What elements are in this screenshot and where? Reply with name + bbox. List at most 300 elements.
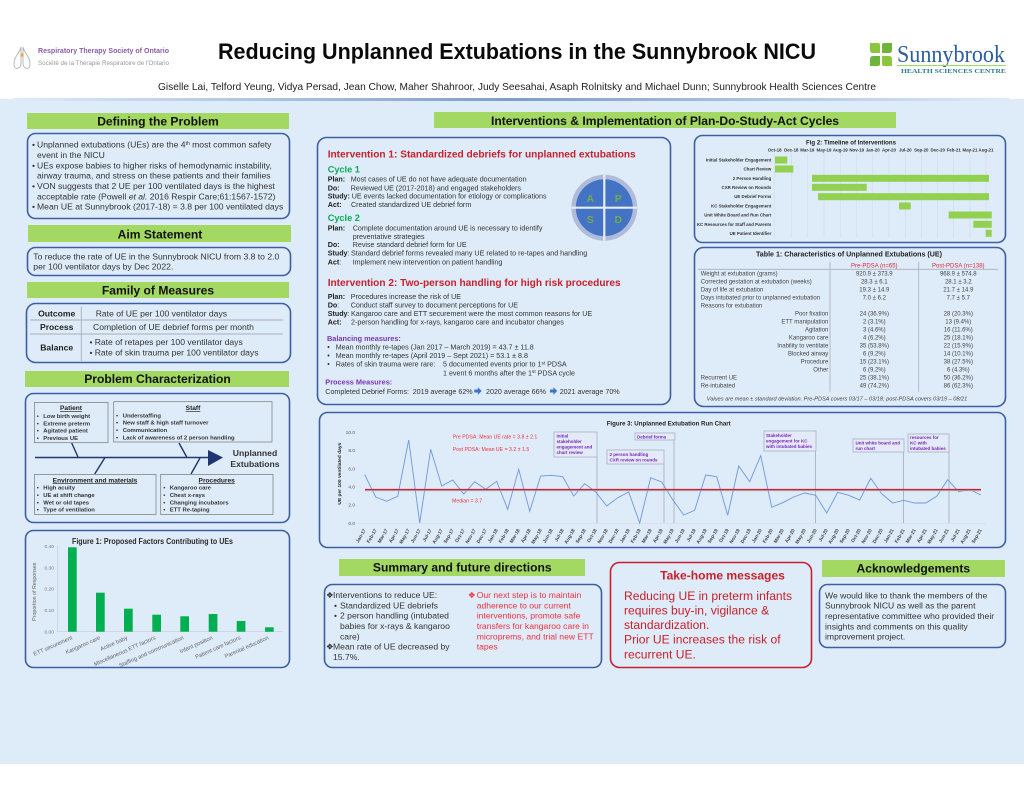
text: summary left: •: [334, 611, 337, 621]
box: staff: •: [116, 413, 118, 419]
box: staff: Staff: [186, 405, 201, 412]
text: summary left: Interventions to reduce UE:: [333, 590, 437, 600]
month labels: May-18: [530, 528, 544, 545]
box: staff: New staff & high staff turnover: [123, 421, 209, 427]
table: characteristics: 28.3 ± 6.1: [861, 279, 888, 285]
arrow: [474, 387, 482, 395]
table: measures: Rate of skin trauma per 100 ventilator days: [95, 347, 259, 357]
text: summary left: 2 person handling (intubated: [340, 611, 449, 621]
text: aim: per 100 ventilator days by Dec 2022.: [33, 262, 173, 272]
box: staff: Lack of awareness of 2 person handling: [123, 435, 235, 441]
box: environment and materials: Environment and materials: [53, 477, 138, 484]
gantt chart: KC Stakeholder Engagement: [711, 204, 772, 208]
callout: 2 person handling: CXR review on rounds: [610, 458, 658, 462]
text: summary right: interventions, promote safe: [477, 611, 581, 621]
icon: PDSA cycle: [571, 175, 637, 241]
text: problem bullets: event in the NICU: [37, 150, 105, 160]
cycle 2: Do:: [328, 241, 340, 249]
month labels: Jun-20: [806, 528, 819, 544]
bar chart: proposed factors: Active baby: [100, 635, 129, 653]
callout: initial stakeholder engagement: chart review: [556, 450, 583, 455]
month labels: Apr-18: [520, 528, 533, 544]
text: summary right: ❖: [468, 590, 476, 600]
balancing measures: •: [327, 361, 330, 369]
table: characteristics: Day of life at extubation: [701, 287, 763, 293]
table: characteristics: Recurrent UE: [701, 376, 737, 382]
month labels: Jul-20: [818, 528, 830, 543]
box: environment and materials: Wet or old tapes: [43, 500, 90, 506]
line chart: 10.0: [346, 430, 355, 436]
intervention 2: Plan:: [328, 293, 345, 301]
heading: table 1: Table 1: Characteristics of Unplanned Extubations (UE): [756, 252, 942, 259]
table: measures: Completion of UE debrief forms per month: [93, 322, 254, 332]
month labels: Aug-17: [431, 528, 445, 545]
intervention 1: [328, 150, 637, 266]
text: problem bullets: Unplanned extubations (UEs) are the 4: [37, 140, 186, 150]
balancing measures: •: [327, 352, 330, 360]
text: problem bullets: airway trauma, and stress on these patients and their families: [37, 171, 271, 181]
table: characteristics: 15 (23.1%): [860, 360, 889, 366]
panel: take-home messages: [610, 562, 812, 668]
heading: acknowledgements: [822, 560, 1005, 577]
table: characteristics: 968.9 ± 574.8: [940, 271, 977, 277]
cycle 1: Cycle 1: [328, 164, 360, 174]
callout: stakeholder engagement for KC: engagement for KC: [766, 438, 808, 444]
line chart: 4.0: [348, 484, 355, 490]
table: characteristics: Re-intubated: [701, 384, 735, 390]
month labels: Mar-20: [773, 528, 786, 544]
cycle 1: UE events lacked documentation for etiology or complications: [352, 193, 547, 201]
bar chart: proposed factors: Parental education: [224, 635, 270, 660]
month labels: Sep-21: [971, 528, 984, 545]
month labels: Feb-21: [894, 528, 907, 544]
gantt chart: Nov-19: [849, 148, 865, 153]
month labels: Sep-18: [575, 528, 588, 545]
panel: defining the problem: [27, 113, 290, 218]
text: acknowledgements: insights and comments on this quality: [825, 621, 969, 631]
box: staff: •: [116, 428, 118, 434]
line chart: UE per 100 ventilated days: [337, 442, 343, 505]
title: Reducing Unplanned Extubations in the Sunnybrook NICU: [218, 39, 816, 64]
gantt chart: Jul-20: [899, 148, 912, 153]
bar chart: proposed factors: 0.20: [44, 586, 54, 592]
callout: initial stakeholder engagement: Initial: [556, 434, 568, 438]
month labels: Mar-21: [905, 528, 918, 544]
panel: figure 2 timeline: [694, 136, 1006, 242]
line chart: 6.0: [348, 466, 355, 472]
table: characteristics: 16 (11.6%): [944, 327, 973, 333]
box: patient: Agitated patient: [43, 429, 88, 435]
table: characteristics: Other: [813, 368, 828, 374]
bar chart: proposed factors: [32, 544, 283, 669]
month labels: Nov-20: [861, 528, 874, 545]
month labels: Jun-19: [674, 528, 687, 544]
icon: PDSA cycle: A: [587, 193, 595, 205]
month labels: Jun-18: [542, 528, 555, 544]
text: summary left: ❖: [326, 642, 334, 652]
cycle 1: [328, 164, 547, 209]
logo: Respiratory Therapy Society of Ontario: Société de la Thérapie Respiratoire de l'Ontario: [38, 60, 169, 67]
box: procedures: •: [163, 493, 165, 499]
month labels: Aug-18: [563, 528, 577, 545]
text: summary left: care): [340, 631, 360, 641]
gantt chart: Oct-18: [768, 148, 782, 153]
diagram: fishbone: [34, 402, 280, 514]
box: patient: •: [37, 414, 39, 420]
box: procedures: Chest x-rays: [170, 493, 206, 499]
bar chart: proposed factors: 0.40: [44, 544, 54, 550]
callout: 2 person handling: [607, 450, 664, 464]
table: characteristics: 28.1 ± 3.2: [945, 279, 972, 285]
month labels: Aug-19: [695, 528, 709, 545]
table: characteristics: Kangaroo care: [789, 335, 829, 341]
process measures: [325, 378, 620, 396]
cycle 1: Act:: [328, 201, 342, 209]
gantt chart: Aug-19: [833, 148, 848, 153]
process measures: Completed Debrief Forms:: [325, 388, 409, 396]
gantt chart: Dec-18: [784, 148, 799, 153]
panel: acknowledgements: [820, 560, 1006, 648]
line chart: 2.0: [348, 502, 355, 508]
month labels: Jul-17: [422, 528, 434, 543]
table: characteristics: 7.7 ± 5.7: [947, 295, 971, 301]
box: staff: [114, 402, 272, 442]
line chart: 0.0: [348, 521, 355, 527]
heading: aim statement: [28, 225, 291, 242]
cycle 2: preventative strategies: [353, 233, 425, 241]
table: characteristics: 6 (9.2%): [863, 352, 886, 358]
text: take-home: Prior UE increases the risk of: [624, 632, 781, 646]
balancing measures: PDSA: [545, 361, 567, 369]
box: patient: •: [37, 421, 39, 427]
process measures: 2019 average 62%: [413, 388, 473, 396]
intervention 2: Do: [328, 302, 338, 310]
box: procedures: [161, 474, 273, 514]
month labels: Feb-19: [630, 528, 643, 544]
cycle 2: [328, 213, 587, 266]
month labels: Nov-18: [597, 528, 610, 545]
text: summary left: babies for x-rays & kangaroo: [340, 621, 450, 631]
callout: 2 person handling: 2 person handling: [610, 452, 649, 457]
month labels: Jan-21: [883, 528, 896, 544]
balancing measures: 5 documented events prior to 1: [443, 361, 541, 369]
gantt chart: Chart Review: [743, 166, 772, 172]
text: problem bullets: Mean UE at Sunnybrook (2017-18) = 3.8 per 100 ventilated days: [37, 202, 283, 212]
panel: interventions: [318, 138, 670, 404]
table: characteristics: 21.7 ± 14.9: [943, 287, 974, 293]
month labels: Dec-20: [872, 528, 885, 545]
box: staff: Understaffing: [123, 413, 161, 419]
process measures: Process Measures:: [325, 378, 392, 387]
text: problem bullets: most common safety: [190, 140, 272, 150]
text: summary right: tapes: [477, 642, 498, 652]
box: procedures: Changing incubators: [170, 500, 229, 506]
table: characteristics: Corrected gestation at extubation (weeks): [701, 279, 812, 285]
table: characteristics: 3 (4.6%): [863, 327, 886, 333]
balancing measures: st: [541, 360, 546, 366]
month labels: Sep-20: [839, 528, 852, 545]
text: summary left: Mean rate of UE decreased by: [333, 642, 450, 652]
box: procedures: ETT Re-taping: [170, 508, 210, 514]
text: take-home: Reducing UE in preterm infants: [624, 589, 792, 603]
gantt chart: [697, 148, 994, 238]
table: characteristics: Agitation: [805, 327, 828, 333]
text: problem bullets: •: [32, 160, 35, 170]
table: characteristics: 49 (74.2%): [860, 384, 889, 390]
box: patient: •: [37, 429, 39, 435]
table: characteristics: 24 (36.9%): [860, 311, 889, 317]
gantt chart: May-21: [963, 148, 978, 153]
balancing measures: Mean monthly re-tapes (April 2019 – Sept 2021) = 53.1 ± 8.8: [336, 352, 528, 360]
month labels: Feb-18: [498, 528, 511, 544]
month labels: Jun-17: [410, 528, 423, 544]
process measures: 2020 average 66%: [486, 388, 547, 396]
table: characteristics: 25 (18.1%): [944, 335, 973, 341]
month labels: Jan-19: [619, 528, 632, 544]
annotation: post PDSA mean: Post PDSA: Mean UE = 3.2 ± 1.5: [453, 447, 529, 453]
panel: aim statement: [28, 225, 291, 276]
gantt chart: KC Resources for Staff and Parents: [697, 222, 772, 227]
panel: figure 1: [26, 530, 290, 669]
gantt chart: Apr-20: [882, 148, 897, 153]
text: summary right: adherence to our current: [477, 600, 571, 610]
callout: stakeholder engagement for KC: with intubated babies: [765, 444, 812, 449]
heading: summary: [339, 559, 585, 576]
logo: Sunnybrook Health Sciences Centre: [870, 42, 1006, 75]
table: characteristics: [701, 264, 985, 390]
table: measures: [38, 308, 259, 357]
callout: unit white board: Unit white board and: [856, 440, 900, 446]
table: characteristics: 28 (20.3%): [944, 311, 973, 317]
intervention 2: Kangaroo care and ETT securement were the most common reasons for UE: [351, 310, 592, 318]
arrow: [550, 387, 557, 395]
text: summary left: Standardized UE debriefs: [340, 600, 438, 610]
heading: family of measures: [27, 282, 289, 298]
text: acknowledgements: improvement project.: [825, 632, 905, 642]
cycle 1: Study:: [328, 193, 350, 201]
heading: acknowledgements: Acknowledgements: [857, 562, 970, 576]
month labels: Dec-19: [740, 528, 753, 545]
balancing measures: Mean monthly re-tapes (Jan 2017 – March 2019) = 43.7 ± 11.8: [336, 343, 534, 351]
icon: PDSA cycle: D: [615, 214, 623, 226]
month labels: May-21: [926, 528, 940, 545]
intervention 2: Act:: [328, 319, 342, 327]
table: characteristics: 6 (9.2%): [863, 368, 886, 374]
bar chart: proposed factors: 0.30: [44, 566, 54, 572]
callout: resources for KC: resources for: [910, 435, 939, 440]
intervention 2: [325, 278, 621, 396]
cycle 1: Created standardized UE debrief form: [351, 201, 471, 209]
gantt chart: Aug-21: [979, 148, 994, 153]
gantt chart: Mar-19: [800, 148, 815, 153]
annotation: pre PDSA mean: Pre PDSA: Mean UE rate = 3.8 ± 2.1: [453, 435, 537, 441]
table: characteristics: 6 (4.3%): [947, 368, 970, 374]
gantt chart: Initial Stakeholder Engagement: [706, 158, 772, 162]
table footnote: Values are mean ± standard deviation. Pre-PDSA covers 03/17 – 03/18; post-PDSA covers 03/19 – 08/21: [707, 396, 967, 402]
table: characteristics: Weight at extubation (grams): [701, 271, 778, 277]
cycle 2: Cycle 2: [328, 213, 360, 223]
box: environment and materials: •: [37, 486, 39, 492]
table: characteristics: 22 (15.9%): [944, 343, 973, 349]
box: patient: Low birth weight: [43, 414, 90, 420]
heading: problem characterization: [25, 371, 289, 387]
month labels: Aug-20: [827, 528, 841, 545]
gantt chart: CXR Review on Rounds: [722, 185, 772, 190]
panel: summary and future directions: [324, 559, 602, 668]
callout: unit white board: run chart: [856, 446, 876, 451]
intervention 2: Intervention 2: Two-person handling for high risk procedures: [328, 278, 621, 289]
cycle 2: Plan:: [328, 224, 345, 232]
month labels: Sep-19: [707, 528, 720, 545]
panel: family of measures: [26, 282, 290, 362]
month labels: Jul-19: [686, 528, 698, 543]
callout: initial stakeholder engagement: stakeholder: [556, 439, 582, 444]
box: procedures: Procedures: [199, 477, 235, 484]
bar chart: proposed factors: 0.00: [44, 630, 54, 636]
gantt chart: Feb-21: [947, 148, 961, 153]
intervention 2: Procedures increase the risk of UE: [351, 293, 461, 301]
callout: debrief forms: [635, 433, 675, 440]
text: problem bullets: •: [32, 140, 35, 150]
table: characteristics: Reasons for extubation: [701, 303, 762, 309]
intervention 2: 2-person handling for x-rays, kangaroo care and incubator changes: [351, 319, 564, 327]
callout: resources for KC: KC with: [910, 440, 927, 446]
heading: figure 1: Figure 1: Proposed Factors Contributing to UEs: [72, 537, 233, 546]
panel: figure 3 run chart: [320, 412, 1006, 548]
table: characteristics: Inability to ventilate: [777, 343, 829, 349]
table: measures: •: [90, 337, 93, 347]
month labels: Nov-19: [729, 528, 742, 545]
gantt chart: 2 Person Handling: [733, 176, 772, 181]
month labels: May-17: [398, 528, 412, 545]
callout: resources for KC: intubated babies: [910, 446, 946, 451]
gantt chart: UE Patient Identifier: [730, 231, 772, 236]
box: staff: •: [116, 421, 118, 427]
heading: defining the problem: Defining the Problem: [97, 115, 219, 129]
balancing measures: Balancing measures:: [327, 334, 401, 343]
table: characteristics: 86 (62.3%): [944, 384, 973, 390]
heading: problem characterization: Problem Characterization: [84, 372, 231, 386]
month labels: [355, 528, 984, 545]
balancing measures: PDSA cycle: [536, 369, 575, 377]
panel: problem characterization: [25, 371, 290, 522]
month labels: Apr-17: [388, 528, 401, 544]
month labels: Sep-17: [443, 528, 456, 545]
month labels: Oct-18: [586, 528, 599, 544]
text: problem bullets: •: [32, 181, 35, 191]
heading: interventions and implementation: [434, 112, 896, 128]
box: staff: Communication: [123, 428, 168, 434]
logo: Respiratory Therapy Society of Ontario: Respiratory Therapy Society of Ontario: [38, 48, 169, 55]
bar chart: proposed factors: Kangaroo care: [65, 635, 102, 656]
intervention 2: Conduct staff survey to document perceptions for UE: [351, 302, 518, 310]
table: characteristics: ETT manipulation: [781, 319, 828, 325]
text: problem bullets: acceptable rate (Powell: [37, 191, 129, 201]
box: patient: Extreme preterm: [43, 421, 90, 427]
gantt chart: Dec-20: [930, 148, 945, 153]
text: take-home: standardization.: [624, 618, 709, 632]
text: problem bullets: UEs expose babies to higher risks of hemodynamic instability,: [37, 160, 272, 170]
cycle 2: Study: [328, 250, 348, 258]
authors: Giselle Lai, Telford Yeung, Vidya Persad, Jean Chow, Maher Shahroor, Judy Seesahai, Asaph Rolnitsky and Michael Dunn; Sunnybrook Health Sciences Centre: [158, 82, 876, 93]
box: environment and materials: High acuity: [43, 486, 76, 492]
table: measures: Balance: [40, 342, 73, 352]
text: aim: To reduce the rate of UE in the Sunnybrook NICU from 3.8 to 2.0: [33, 251, 280, 261]
text: summary left: ❖: [326, 590, 334, 600]
cycle 2: :: [348, 250, 350, 258]
logo: Respiratory Therapy Society of Ontario: [14, 47, 169, 68]
callout: debrief forms: Debrief forms: [637, 434, 667, 440]
box: procedures: •: [163, 486, 165, 492]
box: environment and materials: [34, 474, 156, 514]
table: measures: Process: [40, 322, 74, 332]
table: characteristics: Poor fixation: [795, 311, 828, 317]
table: measures: Rate of UE per 100 ventilator days: [96, 308, 227, 318]
cycle 1: Most cases of UE do not have adequate documentation: [351, 176, 527, 184]
callout: unit white board: [853, 439, 904, 452]
logo: Sunnybrook Health Sciences Centre: Sunnybrook: [897, 42, 1005, 68]
month labels: Oct-19: [718, 528, 731, 544]
text: acknowledgements: We would like to thank the members of the: [825, 590, 987, 600]
month labels: Mar-18: [509, 528, 522, 544]
box: procedures: •: [163, 500, 165, 506]
table: measures: •: [90, 347, 93, 357]
icon: PDSA cycle: P: [615, 193, 622, 205]
text: summary right: microprems, and trial new ETT: [477, 631, 594, 641]
cycle 2: :: [339, 258, 341, 266]
balancing measures: st: [532, 369, 536, 375]
balancing measures: Rates of skin trauma were rare:: [336, 361, 435, 369]
panel: table 1: [694, 248, 1006, 406]
cycle 2: Implement new intervention on patient handling: [353, 258, 502, 266]
balancing measures: •: [327, 343, 330, 351]
box: environment and materials: UE at shift change: [43, 493, 95, 499]
heading: aim statement: Aim Statement: [118, 227, 202, 241]
month labels: Aug-21: [959, 528, 973, 545]
logo: Sunnybrook Health Sciences Centre: HEALTH SCIENCES CENTRE: [901, 68, 1006, 75]
month labels: Jan-20: [751, 528, 764, 544]
callout: initial stakeholder engagement: engagement and: [556, 444, 593, 450]
month labels: Mar-19: [641, 528, 654, 544]
cycle 2: Standard debrief forms revealed many UE related to re-tapes and handling: [351, 250, 587, 258]
text: summary left: 15.7%.: [333, 652, 360, 662]
month labels: Feb-17: [366, 528, 379, 544]
month labels: Nov-17: [465, 528, 478, 545]
month labels: Jan-17: [355, 528, 368, 544]
table: characteristics: 920.9 ± 373.9: [856, 271, 893, 277]
box: environment and materials: Type of ventilation: [43, 508, 95, 514]
callout: initial stakeholder engagement: [554, 432, 597, 457]
cycle 1: Do:: [328, 184, 340, 192]
intervention 2: Study: [328, 310, 348, 318]
table: characteristics: Procedure: [801, 360, 829, 366]
month labels: Dec-18: [608, 528, 621, 545]
table: characteristics: 50 (36.2%): [944, 376, 973, 382]
cycle 1: Reviewed UE (2017-2018) and engaged stakeholders: [351, 184, 521, 192]
gantt chart: May-19: [817, 148, 832, 153]
text: take-home: recurrent UE.: [624, 647, 696, 661]
cycle 2: Act: [328, 258, 340, 266]
text: acknowledgements: Sunnybrook NICU as well as the parent: [825, 601, 976, 611]
month labels: Jul-21: [950, 528, 962, 543]
table: measures: Outcome: [38, 308, 76, 318]
month labels: Jun-21: [938, 528, 951, 544]
callout: stakeholder engagement for KC: [764, 431, 816, 451]
table: characteristics: 7.0 ± 6.2: [863, 295, 887, 301]
box: environment and materials: •: [37, 508, 39, 514]
gantt chart: Jan-20: [866, 148, 880, 153]
box: patient: Patient: [60, 405, 83, 412]
